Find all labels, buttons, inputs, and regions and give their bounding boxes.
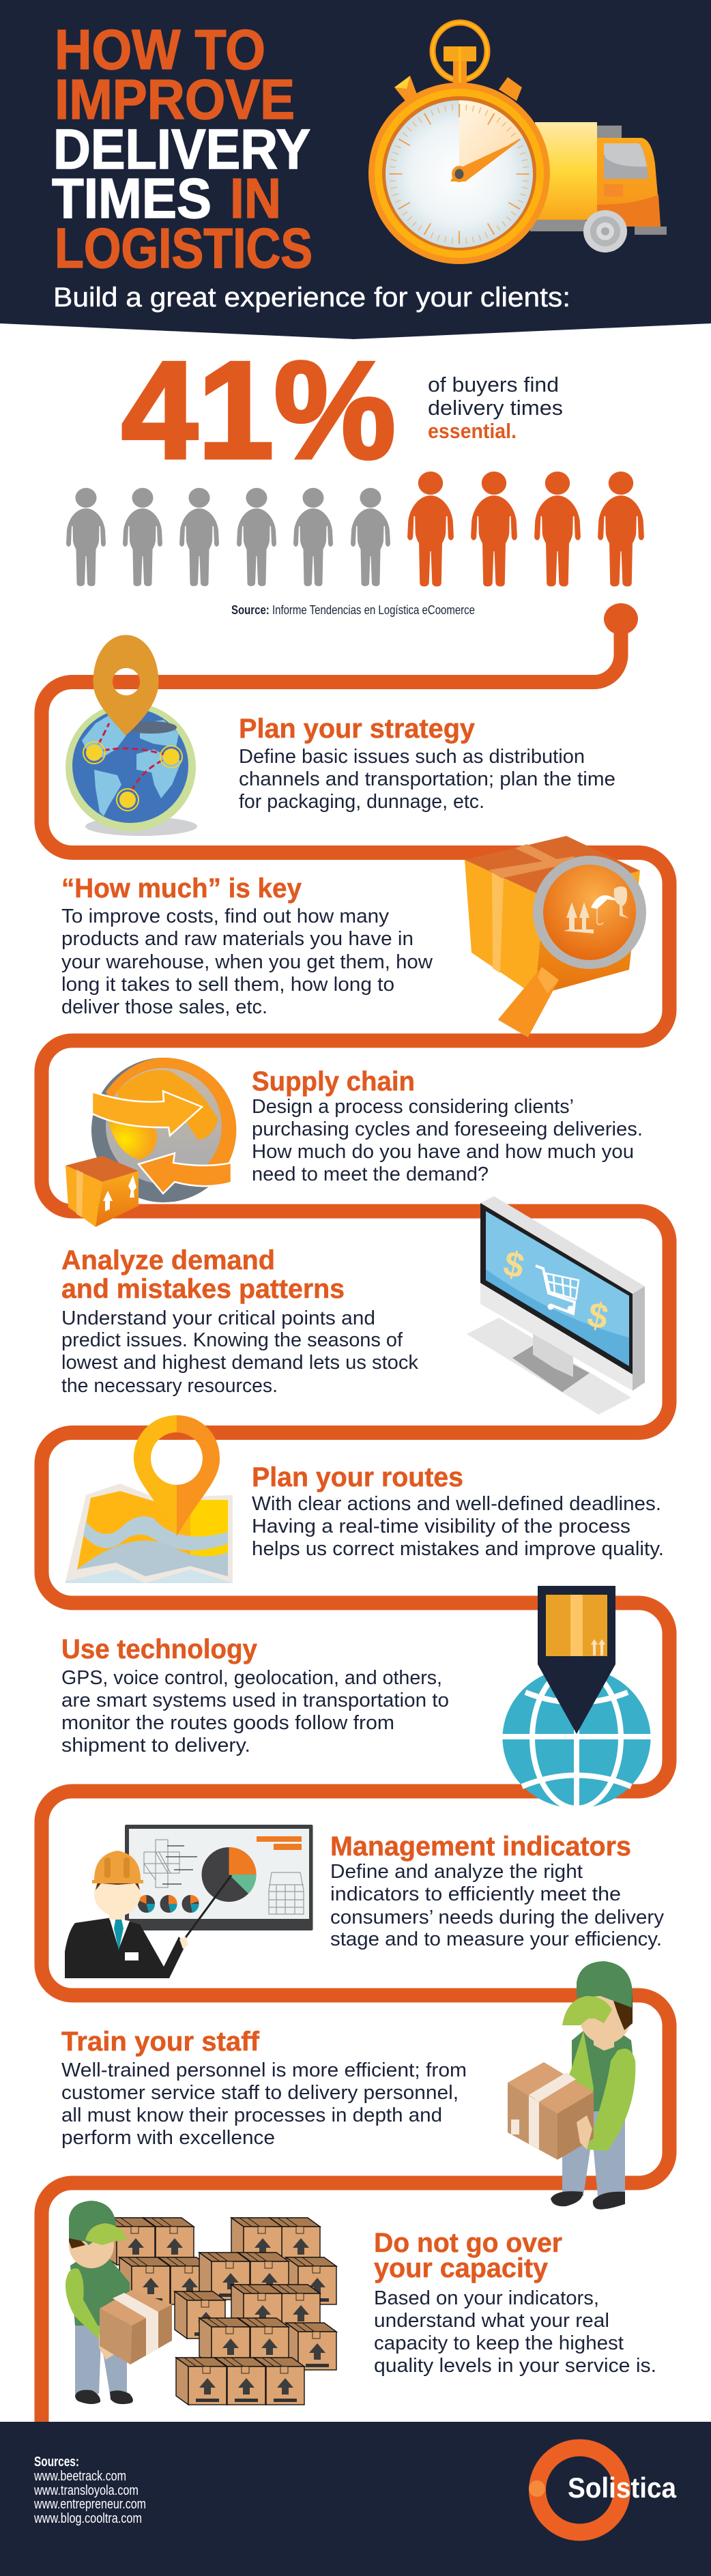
step 8 text: perform with excellence [61,2127,275,2149]
step 6 text: GPS, voice control, geolocation, and others, [61,1667,442,1689]
statistic caption: of buyers find [428,373,559,396]
icon: delivery truck [530,122,667,252]
step 5 text: With clear actions and well-defined deadlines. [252,1493,661,1515]
step 4 text: predict issues. Knowing the seasons of [61,1329,403,1351]
title: DELIVERY [53,117,310,181]
step 4 heading: Analyze demand [61,1245,275,1275]
step 3 text: purchasing cycles and foreseeing deliveries. [252,1118,643,1140]
footer background [0,2422,711,2576]
step 6 heading: Use technology [61,1634,258,1664]
step 7 text: Define and analyze the right [330,1861,583,1883]
logo: Solistica: Solistica [568,2472,677,2504]
step 9 heading [374,2228,562,2283]
step 9 text [374,2287,656,2377]
step 3 text: How much do you have and how much you [252,1141,634,1163]
step 3 text: Design a process considering clients’ [252,1096,574,1118]
title: HOW TO [55,18,265,81]
step 9 illustration: stacked cartons [104,2218,336,2405]
step 4 text: lowest and highest demand lets us stock [61,1352,418,1374]
step 2 text: long it takes to sell them, how long to [61,974,394,996]
step 4 heading: and mistakes patterns [61,1274,345,1304]
step 9 text: understand what your real [374,2310,609,2332]
step 2 text: products and raw materials you have in [61,928,413,950]
statistic caption: essential. [428,419,517,443]
step 7 heading: Management indicators [330,1832,631,1862]
step 1 heading: Plan your strategy [239,714,476,744]
step 1 text: Define basic issues such as distribution [239,746,585,768]
step 2 text: To improve costs, find out how many [61,906,390,927]
step 6 text: are smart systems used in transportation to [61,1690,449,1711]
subtitle: Build a great experience for your clients: [53,283,570,313]
source note: Source: Informe Tendencias en Logística eCoomerce [231,603,475,617]
step 7 text [330,1861,665,1950]
step 9 text: quality levels in your service is. [374,2355,656,2377]
step 2 heading: “How much” is key [61,873,302,903]
step 5 illustration: map with pin [66,1415,233,1583]
step 7 text: consumers’ needs during the delivery [330,1907,665,1928]
step 6 illustration: globe with location pin and box [502,1586,651,1808]
footer sources: Sources: [34,2455,79,2470]
title: LOGISTICS [55,216,313,280]
step 3 heading: Supply chain [252,1067,415,1097]
step 4 text: the necessary resources. [61,1375,278,1397]
step 1 illustration: globe with pin [66,635,197,836]
header background [0,0,711,339]
step 2 text: deliver those sales, etc. [61,996,267,1018]
step 9 text: Based on your indicators, [374,2287,599,2309]
step 9 text: capacity to keep the highest [374,2332,624,2354]
statistic caption: delivery times [428,396,563,420]
step 7 text: indicators to efficiently meet the [330,1883,621,1905]
logo: Solistica [529,2448,677,2532]
journey path [42,603,669,2422]
footer sources: www.blog.cooltra.com [33,2511,142,2526]
step 7 text: stage and to measure your efficiency. [330,1928,662,1950]
step 2 text: your warehouse, when you get them, how [61,951,433,973]
footer sources [33,2455,146,2526]
step 8 illustration: delivery man with box [508,1961,635,2210]
step 4 text: Understand your critical points and [61,1307,375,1329]
title [52,18,313,280]
step 2 illustration: box with magnifier [465,836,646,1037]
step 5 text [252,1493,664,1560]
step 9 illustration: worker with box [66,2201,172,2404]
title: TIMES [52,167,212,230]
title: IMPROVE [55,68,295,131]
step 4 illustration: computer monitor with cart: $ [584,1294,611,1337]
step 9 heading: Do not go over [374,2228,562,2258]
step 3 text: need to meet the demand? [252,1163,489,1185]
step 7 illustration: presenter and board [65,1825,313,1978]
step 6 text [61,1667,449,1756]
step 8 heading: Train your staff [61,2027,260,2057]
step 5 text: helps us correct mistakes and improve quality. [252,1538,664,1560]
step 1 text: for packaging, dunnage, etc. [239,791,484,813]
pictogram: people [66,472,644,586]
icon: stopwatch [368,23,550,264]
statistic 41%: 41% [121,333,396,488]
step 8 text: customer service staff to delivery personnel, [61,2082,459,2104]
step 8 text [61,2059,467,2149]
step 4 heading [61,1245,345,1304]
step 9 heading: your capacity [374,2253,549,2283]
step 4 illustration: computer monitor with cart [467,1196,645,1415]
step 4 illustration: computer monitor with cart: $ [500,1243,527,1286]
step 8 text: all must know their processes in depth and [61,2104,442,2126]
title: IN [230,167,281,230]
footer sources: www.transloyola.com [33,2483,139,2498]
step 6 text: shipment to delivery. [61,1735,250,1756]
statistic caption [428,373,563,443]
step 5 text: Having a real-time visibility of the process [252,1516,630,1537]
step 6 text: monitor the routes goods follow from [61,1712,394,1734]
step 1 text: channels and transportation; plan the time [239,768,615,790]
footer sources: www.beetrack.com [33,2469,126,2484]
step 2 text [61,906,433,1018]
step 1 text [239,746,615,813]
step 8 text: Well-trained personnel is more efficient; from [61,2059,467,2081]
footer sources: www.entrepreneur.com [33,2497,146,2512]
step 4 text [61,1307,418,1397]
step 5 heading: Plan your routes [252,1462,463,1492]
step 3 illustration: globe with arrows and box [66,1058,236,1227]
step 3 text [252,1096,643,1185]
